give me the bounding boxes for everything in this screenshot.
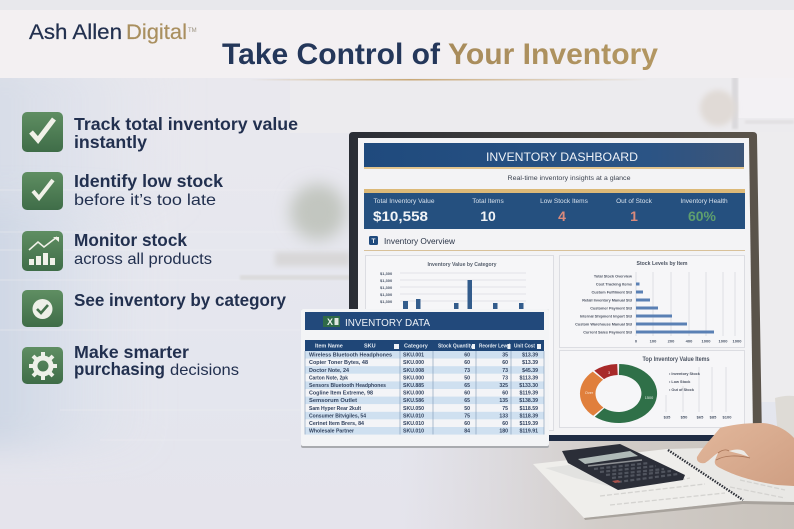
chart: inventory value by category: $1,300 — [380, 299, 393, 304]
feature 5: make smarter purchasing decisions — [22, 342, 239, 384]
table rows: 180 — [499, 429, 508, 435]
table rows: 60 — [502, 360, 508, 366]
table rows: 35 — [502, 353, 508, 359]
notebook with spiral binding — [533, 448, 794, 520]
KPI: total items: 10 — [480, 208, 496, 224]
chart: inventory value by category: $1,300 — [380, 285, 393, 290]
table rows: 50 — [464, 406, 470, 412]
chart: stock levels by item: Current Sales Payment Std — [583, 330, 633, 334]
chart: top inventory value items donut — [560, 350, 744, 428]
KPI: out of stock — [616, 198, 653, 224]
chart: top inventory value items donut: Top Inventory Value Items — [642, 357, 710, 363]
chart: top inventory value items donut: Over — [585, 391, 594, 395]
table rows: $45.39 — [522, 368, 538, 374]
KPI: total inventory value: $10,558 — [373, 208, 428, 224]
table header: SKU — [364, 344, 376, 350]
table rows: Wireless Bluetooth Headphones — [309, 353, 392, 359]
table header: Reorder Level — [479, 344, 510, 350]
table rows: $119.39 — [520, 391, 538, 397]
chart: top inventory value items donut: 1500 — [645, 396, 653, 400]
feature 3: monitor stock: across all products — [74, 251, 212, 268]
chart: inventory value by category: $1,300 — [380, 292, 393, 297]
gap between fingers — [729, 450, 749, 457]
chart: stock levels by item: Internal Shipment Import Std — [580, 314, 633, 318]
chart: stock levels by item: 1000 — [719, 338, 728, 344]
table rows: $113.39 — [520, 375, 538, 381]
table rows: Doctor Note, 24 — [309, 368, 349, 374]
KPI: low stock items: 4 — [558, 208, 566, 224]
desk — [400, 440, 794, 529]
table rows: Semsorum Outlet — [309, 398, 357, 404]
feature 3: monitor stock — [22, 230, 212, 271]
table rows — [305, 351, 544, 435]
title: Your Inventory — [448, 38, 658, 71]
panel header with Excel icon: INVENTORY DATA — [345, 318, 430, 329]
donut segment: low stock — [580, 372, 603, 416]
monitor screen — [358, 138, 753, 435]
KPI: total items — [472, 198, 504, 224]
table rows: SKU.586 — [403, 398, 424, 404]
panel header with Excel icon — [305, 312, 544, 330]
dashboard header: INVENTORY DASHBOARD — [486, 152, 638, 164]
donut segment: out of stock — [594, 364, 618, 379]
feature 5: make smarter purchasing decisions: Make smarter — [74, 342, 189, 362]
chart: stock levels by item: 100 — [650, 338, 657, 344]
table rows: SKU.010 — [403, 421, 424, 427]
table rows: Cerinet Item Brers, 84 — [309, 421, 364, 427]
chart: stock levels by item: 0 — [635, 338, 638, 344]
feature 2: identify low stock: before it’s too late — [74, 192, 216, 209]
feature 1: track total inventory value — [22, 112, 298, 152]
table rows: SKU.050 — [403, 406, 424, 412]
table rows: SKU.010 — [403, 413, 424, 419]
feature 2: identify low stock: Identify low stock — [74, 171, 223, 191]
feature 4: see inventory by category — [22, 290, 286, 327]
table rows: 133 — [499, 413, 508, 419]
KPI: inventory health: 60% — [688, 208, 717, 224]
table rows: $133.30 — [519, 383, 538, 389]
hand — [697, 423, 794, 486]
table rows: Copier Toner Bytes, 48 — [309, 360, 368, 366]
table rows: SKU.000 — [403, 375, 424, 381]
table rows: Wholesale Partner — [309, 429, 354, 435]
table rows: 50 — [464, 375, 470, 381]
feature 5: make smarter purchasing decisions: purchasing — [74, 359, 165, 379]
monitor — [349, 132, 762, 441]
table rows: $138.39 — [519, 398, 538, 404]
KPI: low stock items — [540, 198, 589, 224]
table rows: 60 — [502, 421, 508, 427]
feature 5: make smarter purchasing decisions: decisions — [170, 362, 239, 379]
chart: stock levels by item: 1000 — [702, 338, 711, 344]
chart: stock levels by item: Total Stock Overview — [594, 274, 632, 278]
chart: inventory value by category: $1,300 — [380, 278, 393, 283]
table rows: Sam Hyper Rear 2kult — [309, 406, 361, 412]
table rows: $118.59 — [520, 406, 538, 412]
chart: top inventory value items donut: • Inventory Stock — [669, 372, 701, 376]
table rows: Sensors Bluetooth Headphones — [309, 383, 386, 389]
table rows: 60 — [464, 360, 470, 366]
chart: top inventory value items donut: $85 — [710, 414, 717, 420]
logo: Ash Allen Digital: Ash Allen — [29, 20, 122, 44]
feature 2: identify low stock — [22, 171, 223, 210]
chart: top inventory value items donut: 3 — [608, 371, 610, 375]
monitor frame — [349, 132, 762, 441]
table rows: SKU.885 — [403, 383, 424, 389]
table rows: Cogline Item Extreme, 98 — [309, 391, 373, 397]
table rows: SKU.001 — [403, 353, 424, 359]
table rows: $119.91 — [520, 429, 538, 435]
chart: stock levels by item: 200 — [668, 338, 675, 344]
table header: Category — [404, 344, 429, 350]
chart: stock levels by item — [560, 256, 744, 348]
chart: stock levels by item: Stock Levels by Item — [636, 261, 688, 267]
table rows: SKU.000 — [403, 391, 424, 397]
table rows: 60 — [464, 353, 470, 359]
feature 1: track total inventory value: instantly — [74, 132, 147, 152]
table rows: SKU.008 — [403, 368, 424, 374]
table rows: 73 — [502, 368, 508, 374]
table rows: Carton Note, 2pk — [309, 375, 348, 381]
chart: top inventory value items donut: $50 — [681, 414, 688, 420]
logo: Ash Allen Digital: TM — [188, 28, 197, 34]
logo: Ash Allen Digital — [29, 20, 197, 44]
KPI: inventory health — [680, 198, 728, 224]
table rows: 325 — [499, 383, 508, 389]
table rows: 60 — [464, 391, 470, 397]
panel header with Excel icon: X — [327, 317, 333, 327]
table header: Stock Quantity — [438, 344, 474, 350]
donut segment: in stock — [595, 364, 657, 423]
chart: top inventory value items donut: $100 — [723, 414, 732, 420]
logo: Ash Allen Digital: Digital — [126, 20, 187, 44]
chart: stock levels by item: Customer Payment Std — [590, 306, 633, 310]
inventory overview heading: T — [372, 238, 376, 245]
table rows: $13.39 — [522, 360, 538, 366]
KPI: inventory health: Inventory Health — [680, 198, 728, 205]
chart: stock levels by item: Retail Inventory Manual Std — [582, 298, 633, 302]
chart: top inventory value items donut: $35 — [664, 414, 671, 420]
feature 4: see inventory by category: See inventory by category — [74, 290, 286, 310]
KPI: total inventory value: Total Inventory Value — [374, 198, 435, 205]
title: Take Control of — [222, 38, 441, 71]
coffee mug — [775, 396, 794, 440]
table rows: 75 — [464, 413, 470, 419]
feature list — [22, 112, 298, 384]
table rows: 65 — [464, 383, 470, 389]
header band — [0, 10, 794, 80]
chart: top inventory value items donut: • Out of Stock — [669, 388, 695, 392]
table rows: SKU.010 — [403, 429, 424, 435]
table rows: 60 — [502, 391, 508, 397]
KPI: out of stock: 1 — [630, 208, 638, 224]
chart: top inventory value items donut: • Low Stock — [669, 380, 691, 384]
chart: inventory value by category: Inventory Value by Category — [428, 262, 497, 268]
table rows: 75 — [502, 406, 508, 412]
table rows: 65 — [464, 398, 470, 404]
chart: stock levels by item: Cost Tracking Items — [596, 282, 632, 286]
KPI: low stock items: Low Stock Items — [540, 198, 589, 205]
table rows: 73 — [464, 368, 470, 374]
table header — [305, 340, 544, 351]
chart: top inventory value items donut: $65 — [697, 414, 704, 420]
KPI: out of stock: Out of Stock — [616, 198, 653, 205]
chart: inventory value by category — [366, 256, 554, 430]
table rows: SKU.000 — [403, 360, 424, 366]
table rows: 84 — [464, 429, 470, 435]
table rows: 73 — [502, 375, 508, 381]
chart: inventory value by category: $1,300 — [380, 271, 393, 276]
table header: Item Name — [315, 344, 343, 350]
inventory data panel — [301, 309, 549, 448]
KPI: total inventory value — [373, 198, 435, 224]
chart: stock levels by item: 400 — [686, 338, 693, 344]
feature 3: monitor stock: Monitor stock — [74, 230, 187, 250]
table rows: 135 — [499, 398, 508, 404]
table rows: $119.39 — [520, 421, 538, 427]
KPI strip — [364, 189, 745, 229]
table rows: $13.39 — [522, 353, 538, 359]
dashboard subtitle: Real-time inventory insights at a glance — [508, 175, 631, 182]
dashboard header — [364, 143, 744, 169]
blurred plant behind monitor — [290, 184, 346, 240]
chart: stock levels by item: Custom Warehouse Manual Std — [575, 322, 633, 326]
chart: stock levels by item: Custom Fulfilment Std — [592, 290, 633, 294]
chart: stock levels by item: 1000 — [733, 338, 742, 344]
table header: Unit Cost — [514, 344, 535, 350]
table rows: $118.39 — [520, 413, 538, 419]
inventory overview heading: Inventory Overview — [384, 236, 456, 246]
inventory overview heading — [364, 236, 745, 251]
KPI: total items: Total Items — [472, 198, 504, 205]
calculator — [562, 444, 685, 490]
title — [222, 38, 658, 71]
feature 1: track total inventory value: Track total inventory value — [74, 114, 298, 134]
table rows: 60 — [464, 421, 470, 427]
table rows: Consumer Bitvigiles, 54 — [309, 413, 366, 419]
